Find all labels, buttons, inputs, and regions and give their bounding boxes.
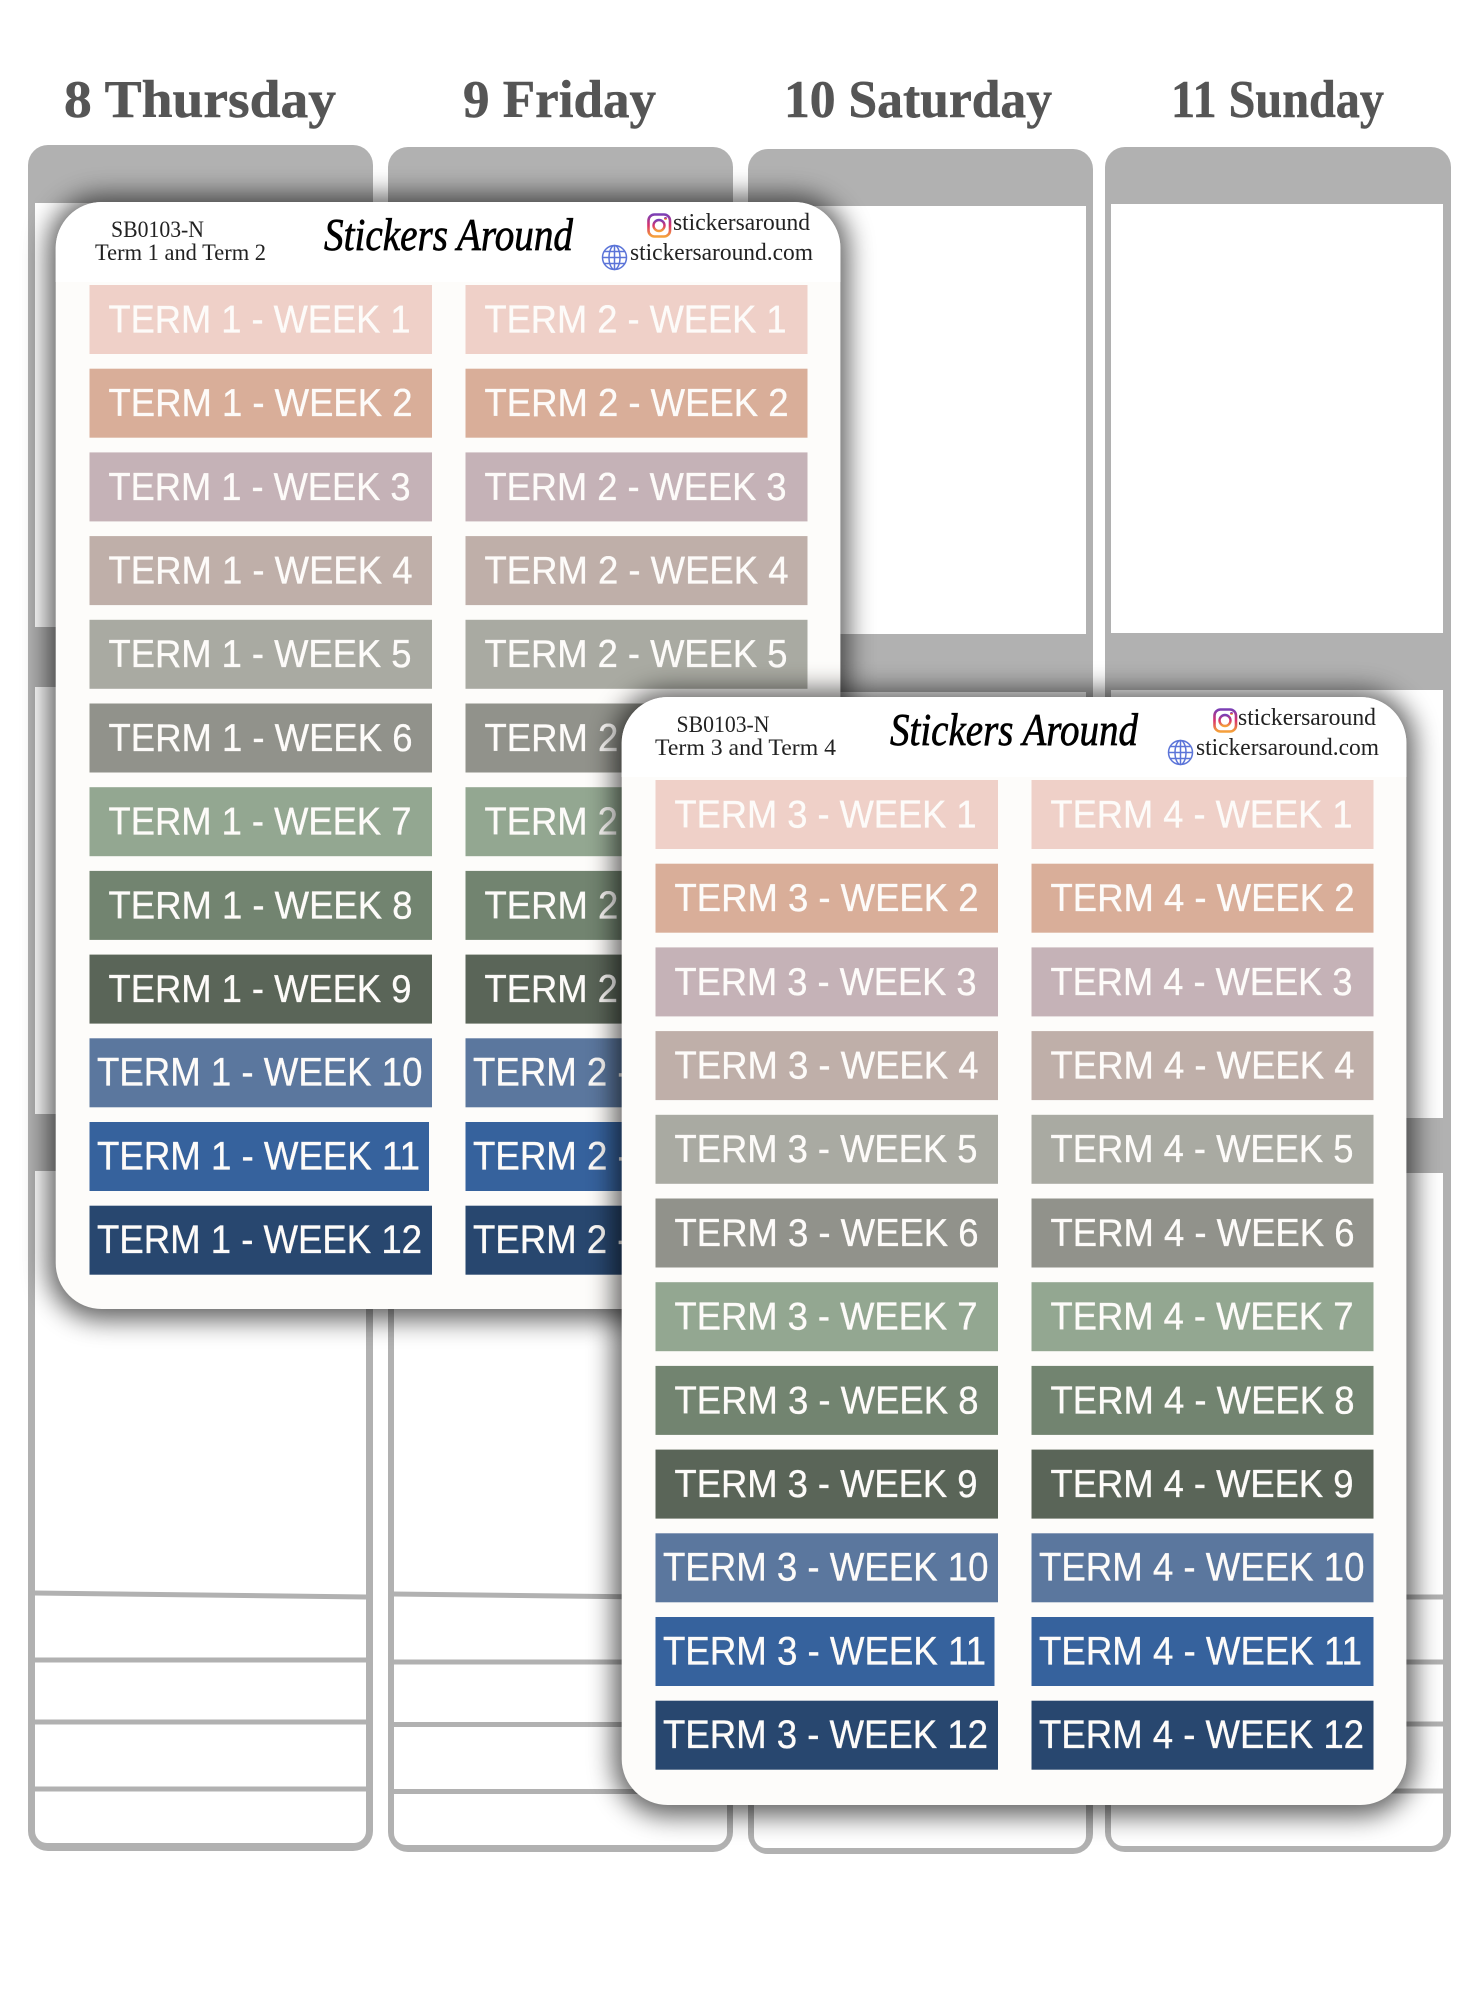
sticker: Term 3 Week 7: TERM 3 - WEEK 7: [674, 1296, 978, 1339]
sticker: Term 1 Week 6: [90, 704, 432, 772]
sticker: Term 1 Week 12: TERM 1 - WEEK 12: [97, 1218, 422, 1262]
sticker: Term 4 Week 6: [1032, 1198, 1374, 1268]
sticker: Term 4 Week 5: TERM 4 - WEEK 5: [1050, 1128, 1354, 1171]
icon: instagram: [648, 214, 670, 236]
sticker: Term 3 Week 4: TERM 3 - WEEK 4: [674, 1044, 978, 1087]
heading: 8 Thursday: 8 Thursday: [64, 71, 336, 129]
sticker: Term 4 Week 2: [1032, 864, 1374, 933]
sticker: Term 1 Week 6: TERM 1 - WEEK 6: [108, 717, 412, 760]
sticker: Term 3 Week 10: [656, 1533, 998, 1602]
brand name: Stickers Around: [324, 209, 574, 260]
sticker: Term 2 Week 1: [466, 285, 808, 354]
sticker: Term 3 Week 6: [656, 1198, 998, 1268]
sticker: Term 3 Week 3: [656, 947, 998, 1016]
sticker: Term 3 Week 12: TERM 3 - WEEK 12: [663, 1713, 988, 1757]
sticker: Term 3 Week 8: TERM 3 - WEEK 8: [674, 1379, 978, 1422]
sticker: Term 4 Week 3: [1032, 947, 1374, 1016]
sticker: Term 2 Week 2: TERM 2 - WEEK 2: [484, 382, 788, 425]
sticker: Term 2 Week 4: [466, 536, 808, 605]
sticker: Term 3 Week 1: [656, 780, 998, 849]
sticker: Term 4 Week 8: TERM 4 - WEEK 8: [1050, 1379, 1354, 1422]
sticker: Term 3 Week 1: TERM 3 - WEEK 1: [674, 793, 976, 836]
sticker: Term 1 Week 2: TERM 1 - WEEK 2: [108, 382, 412, 425]
sticker: Term 4 Week 7: [1032, 1282, 1374, 1351]
sticker: Term 2 Week 1: TERM 2 - WEEK 1: [484, 298, 786, 341]
icon: globe: [1168, 740, 1192, 764]
sticker: Term 1 Week 7: [90, 787, 432, 856]
sticker: Term 4 Week 3: TERM 4 - WEEK 3: [1050, 961, 1352, 1004]
sticker: Term 3 Week 2: [656, 864, 998, 933]
sticker: Term 2 Week 4: TERM 2 - WEEK 4: [484, 549, 788, 592]
sticker: Term 4 Week 8: [1032, 1366, 1374, 1435]
sticker: Term 4 Week 4: TERM 4 - WEEK 4: [1050, 1044, 1354, 1087]
sticker: Term 3 Week 11: TERM 3 - WEEK 11: [663, 1629, 986, 1673]
sticker: Term 1 Week 8: TERM 1 - WEEK 8: [108, 884, 412, 927]
sticker: Term 4 Week 12: TERM 4 - WEEK 12: [1039, 1713, 1364, 1757]
sticker: Term 1 Week 4: TERM 1 - WEEK 4: [108, 549, 412, 592]
sticker: Term 1 Week 8: [90, 871, 432, 940]
sticker: Term 2 Week 5: TERM 2 - WEEK 5: [484, 633, 788, 676]
sticker: Term 2 Week 9: TERM 2 - WEEK 9: [484, 968, 788, 1011]
sticker: Term 4 Week 1: [1032, 780, 1374, 849]
sticker: Term 3 Week 11: [656, 1617, 994, 1686]
sticker: Term 1 Week 10: [90, 1038, 432, 1107]
sticker: Term 2 Week 6: [466, 704, 808, 772]
sticker: Term 2 Week 3: [466, 452, 808, 521]
sticker: Term 4 Week 10: TERM 4 - WEEK 10: [1039, 1546, 1364, 1590]
sticker: Term 4 Week 12: [1032, 1701, 1374, 1770]
website: stickersaround.com: [630, 240, 813, 266]
sticker: Term 2 Week 10: [466, 1038, 808, 1107]
icon: instagram: [1214, 710, 1236, 732]
sku code: SB0103-N: [676, 712, 770, 737]
sticker: Term 1 Week 5: TERM 1 - WEEK 5: [108, 633, 412, 676]
sticker: Term 1 Week 10: TERM 1 - WEEK 10: [97, 1051, 422, 1095]
planner column: Friday: [388, 147, 733, 1852]
sticker: Term 4 Week 9: TERM 4 - WEEK 9: [1050, 1463, 1354, 1506]
sticker: Term 1 Week 11: [90, 1122, 429, 1191]
sticker: Term 2 Week 12: [466, 1206, 808, 1275]
sticker: Term 3 Week 9: TERM 3 - WEEK 9: [674, 1463, 978, 1506]
sticker: Term 4 Week 6: TERM 4 - WEEK 6: [1050, 1212, 1354, 1255]
sticker: Term 1 Week 1: [90, 285, 432, 354]
sticker: Term 3 Week 8: [656, 1366, 998, 1435]
sticker: Term 2 Week 11: TERM 2 - WEEK 11: [473, 1134, 796, 1178]
sticker: Term 4 Week 5: [1032, 1115, 1374, 1184]
sticker: Term 4 Week 7: TERM 4 - WEEK 7: [1050, 1296, 1354, 1339]
sticker: Term 2 Week 2: [466, 369, 808, 438]
sticker: Term 3 Week 5: TERM 3 - WEEK 5: [674, 1128, 978, 1171]
panel: sticker sheet Term 1 and Term 2: [48, 195, 848, 1320]
sticker: Term 1 Week 12: [90, 1206, 432, 1275]
icon: globe: [602, 246, 626, 270]
sticker: Term 3 Week 3: TERM 3 - WEEK 3: [674, 961, 976, 1004]
panel: sticker sheet Term 3 and Term 4: [614, 690, 1414, 1816]
sticker: Term 4 Week 11: [1032, 1617, 1374, 1686]
sheet subtitle: Term 3 and Term 4: [655, 735, 837, 760]
sticker: Term 1 Week 5: [90, 620, 432, 689]
sticker: Term 1 Week 7: TERM 1 - WEEK 7: [108, 801, 412, 844]
sticker: Term 3 Week 10: TERM 3 - WEEK 10: [663, 1546, 988, 1590]
heading: 11 Sunday: 11 Sunday: [1171, 71, 1384, 129]
sticker: Term 2 Week 6: TERM 2 - WEEK 6: [484, 717, 788, 760]
instagram handle: stickersaround: [1238, 705, 1376, 731]
sticker: Term 3 Week 4: [656, 1031, 998, 1100]
sticker: Term 1 Week 1: TERM 1 - WEEK 1: [108, 298, 410, 341]
sticker: Term 2 Week 7: [466, 787, 808, 856]
sticker: Term 2 Week 8: TERM 2 - WEEK 8: [484, 884, 788, 927]
sheet subtitle: Term 1 and Term 2: [95, 240, 266, 265]
sticker: Term 4 Week 10: [1032, 1533, 1374, 1602]
sticker: Term 1 Week 2: [90, 369, 432, 438]
planner column: Thursday: [28, 145, 373, 1851]
planner column: Saturday: [748, 149, 1093, 1854]
sticker: Term 4 Week 1: TERM 4 - WEEK 1: [1050, 793, 1352, 836]
website: stickersaround.com: [1196, 735, 1379, 761]
sticker: Term 3 Week 6: TERM 3 - WEEK 6: [674, 1212, 978, 1255]
instagram handle: stickersaround: [673, 210, 810, 236]
sticker: Term 3 Week 7: [656, 1282, 998, 1351]
sticker: Term 2 Week 5: [466, 620, 808, 689]
sticker: Term 3 Week 5: [656, 1115, 998, 1184]
planner column: Sunday: [1105, 147, 1451, 1852]
sticker: Term 2 Week 7: TERM 2 - WEEK 7: [484, 801, 788, 844]
sticker: Term 4 Week 4: [1032, 1031, 1374, 1100]
sticker: Term 2 Week 12: TERM 2 - WEEK 12: [473, 1218, 798, 1262]
sticker: Term 1 Week 3: TERM 1 - WEEK 3: [108, 466, 410, 509]
brand name: Stickers Around: [890, 704, 1139, 755]
sticker: Term 3 Week 9: [656, 1450, 998, 1519]
sticker: Term 2 Week 11: [466, 1122, 808, 1191]
heading: 9 Friday: 9 Friday: [463, 71, 656, 129]
sku code: SB0103-N: [111, 217, 204, 242]
sticker: Term 4 Week 11: TERM 4 - WEEK 11: [1039, 1629, 1362, 1673]
sticker: Term 3 Week 12: [656, 1701, 998, 1770]
sticker: Term 1 Week 9: [90, 955, 432, 1024]
sticker: Term 4 Week 2: TERM 4 - WEEK 2: [1050, 877, 1354, 920]
sticker: Term 1 Week 4: [90, 536, 432, 605]
sticker: Term 2 Week 3: TERM 2 - WEEK 3: [484, 466, 786, 509]
sticker: Term 2 Week 8: [466, 871, 808, 940]
heading: 10 Saturday: 10 Saturday: [784, 71, 1052, 129]
sticker: Term 4 Week 9: [1032, 1450, 1374, 1519]
sticker: Term 1 Week 9: TERM 1 - WEEK 9: [108, 968, 412, 1011]
sticker: Term 3 Week 2: TERM 3 - WEEK 2: [674, 877, 978, 920]
sticker: Term 1 Week 3: [90, 452, 432, 521]
sticker: Term 1 Week 11: TERM 1 - WEEK 11: [97, 1134, 420, 1178]
sticker: Term 2 Week 10: TERM 2 - WEEK 10: [473, 1051, 798, 1095]
sticker: Term 2 Week 9: [466, 955, 808, 1024]
